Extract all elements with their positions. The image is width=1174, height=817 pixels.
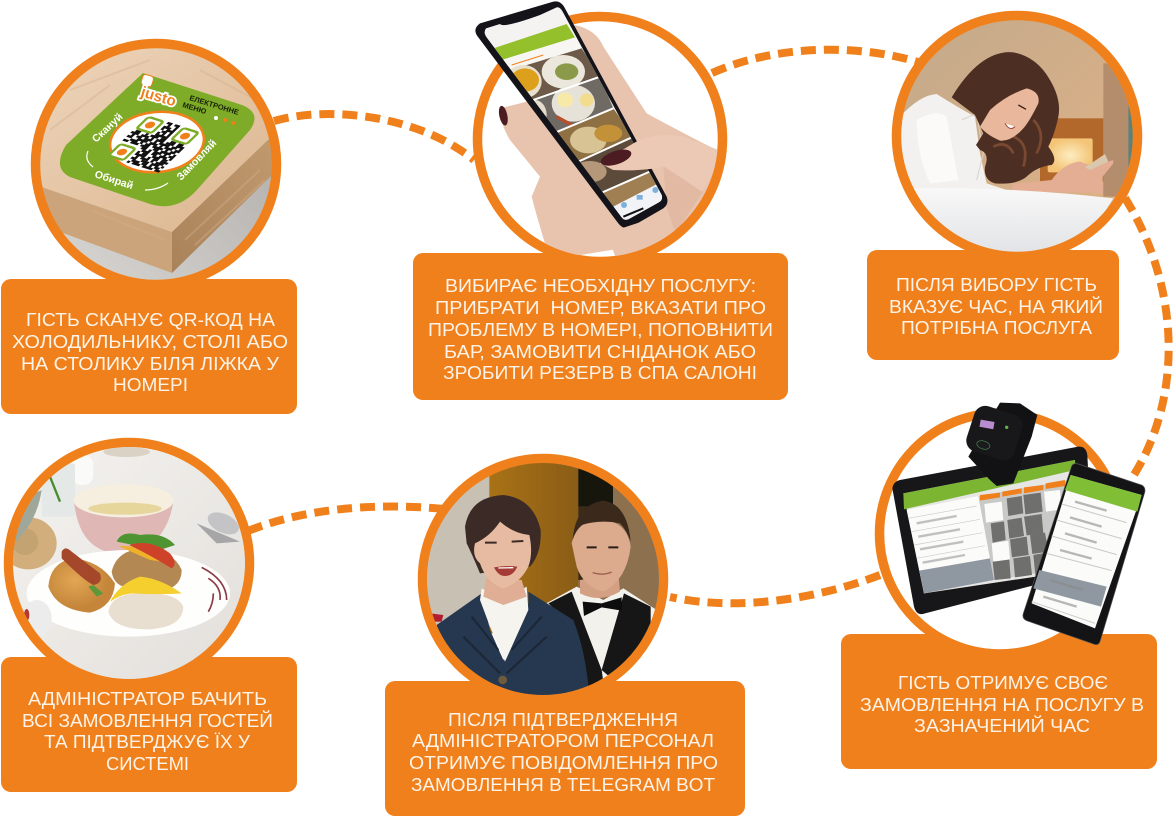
ring: step 1 bbox=[36, 44, 276, 284]
text box: step 2: ПРОБЛЕМУ В НОМЕРІ, ПОПОВНИТИ bbox=[428, 320, 773, 340]
text box: step 1: ХОЛОДИЛЬНИКУ, СТОЛІ АБО bbox=[12, 332, 288, 352]
text box: step 5 bbox=[385, 681, 745, 816]
QR sticker: ЕЛЕКТРОННЕ bbox=[188, 93, 240, 117]
arrow: step 2 to step 3 bbox=[712, 50, 918, 73]
panel: step 2 choose service bbox=[413, 0, 788, 400]
text box: step 4 bbox=[841, 634, 1157, 769]
devices: tablet, phone and watch bbox=[892, 403, 1145, 645]
text box: step 5: АДМІНІСТРАТОРОМ ПЕРСОНАЛ bbox=[412, 731, 714, 751]
ring: step 6 bbox=[8, 442, 250, 684]
arrow: step 4 to step 5 bbox=[670, 575, 880, 603]
text box: step 5: ЗАМОВЛЕННЯ В TELEGRAM BOT bbox=[411, 775, 715, 795]
text box: step 2 bbox=[413, 253, 788, 400]
QR sticker bbox=[60, 73, 254, 206]
panel: step 6 admin confirms bbox=[0, 442, 297, 792]
text box: step 6 bbox=[1, 657, 297, 792]
white disc: step 4 bbox=[884, 418, 1116, 650]
dashed connectors bbox=[248, 50, 1169, 603]
text box: step 2: ЗРОБИТИ РЕЗЕРВ В СПА САЛОНІ bbox=[443, 363, 757, 383]
arrow: step 5 to step 6 bbox=[248, 507, 444, 531]
QR sticker: justo bbox=[138, 83, 178, 110]
phone bbox=[1023, 464, 1145, 645]
text box: step 6: ВСІ ЗАМОВЛЕННЯ ГОСТЕЙ bbox=[22, 710, 273, 731]
text box: step 1: НОМЕРІ bbox=[113, 375, 188, 395]
text box: step 3: ПОТРІБНА ПОСЛУГА bbox=[901, 318, 1092, 338]
text box: step 4: ЗАМОВЛЕННЯ НА ПОСЛУГУ В bbox=[860, 695, 1144, 715]
panel: step 1 scan QR bbox=[1, 40, 297, 414]
text box: step 4: ГІСТЬ ОТРИМУЄ СВОЄ bbox=[898, 673, 1108, 693]
photo: hotel staff bbox=[423, 460, 665, 703]
text box: step 6: ТА ПІДТВЕРДЖУЄ ЇХ У bbox=[44, 732, 251, 752]
text box: step 1: ГІСТЬ СКАНУЄ QR-КОД НА bbox=[26, 310, 275, 330]
text box: step 2: ПРИБРАТИ НОМЕР, ВКАЗАТИ ПРО bbox=[435, 298, 766, 318]
text box: step 6: АДМІНІСТРАТОР БАЧИТЬ bbox=[28, 689, 267, 709]
QR sticker: Замовляй bbox=[175, 137, 219, 183]
text box: step 4: ЗАЗНАЧЕНИЙ ЧАС bbox=[914, 715, 1090, 736]
ring: step 5 bbox=[422, 458, 664, 700]
arrow: step 3 to step 4 bbox=[1125, 198, 1169, 478]
photo: woman with phone on bed bbox=[893, 17, 1140, 257]
text box: step 5: ОТРИМУЄ ПОВІДОМЛЕННЯ ПРО bbox=[409, 753, 718, 773]
text box: step 3: ПІСЛЯ ВИБОРУ ГІСТЬ bbox=[896, 275, 1097, 295]
text box: step 2: БАР, ЗАМОВИТИ СНІДАНОК АБО bbox=[444, 342, 756, 362]
text box: step 2: ВИБИРАЄ НЕОБХІДНУ ПОСЛУГУ: bbox=[445, 276, 756, 296]
arrow: step 1 to step 2 bbox=[274, 114, 474, 160]
text box: step 1 bbox=[1, 279, 297, 414]
ring: step 3 bbox=[896, 16, 1138, 256]
panel: step 5 staff notified bbox=[385, 458, 745, 816]
photo: hand holding phone bbox=[475, 0, 718, 260]
QR sticker: МЕНЮ bbox=[181, 100, 208, 116]
white disc: step 2 bbox=[482, 21, 718, 257]
QR sticker: Обирай bbox=[93, 168, 135, 192]
tablet bbox=[892, 447, 1093, 614]
ring: step 4 bbox=[880, 413, 1120, 654]
photo: breakfast plate bbox=[13, 447, 245, 679]
text box: step 3: ВКАЗУЄ ЧАС, НА ЯКИЙ bbox=[889, 296, 1103, 317]
panel: step 4 receive order bbox=[841, 403, 1157, 769]
text box: step 6: СИСТЕМІ bbox=[106, 754, 189, 774]
panel: step 3 pick time bbox=[867, 16, 1140, 360]
photo: wooden table with QR sticker bbox=[40, 48, 272, 280]
ring: step 2 bbox=[478, 16, 722, 262]
QR sticker: Скануй bbox=[90, 111, 125, 145]
text box: step 5: ПІСЛЯ ПІДТВЕРДЖЕННЯ bbox=[448, 710, 678, 730]
text box: step 3 bbox=[867, 250, 1119, 360]
text box: step 1: НА СТОЛИКУ БІЛЯ ЛІЖКА У bbox=[21, 354, 280, 374]
watch bbox=[963, 403, 1037, 486]
